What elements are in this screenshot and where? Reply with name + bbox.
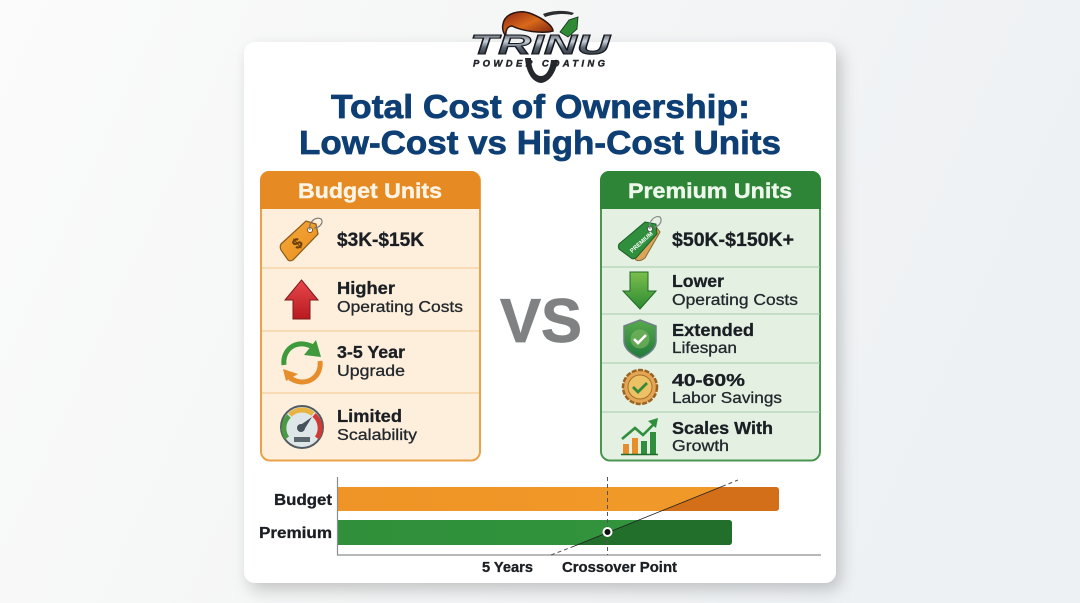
row: growth: Growth (672, 438, 729, 455)
row: price (618, 217, 794, 261)
icon: gauge (281, 406, 323, 448)
axis label: crossover point: Crossover Point (562, 560, 677, 576)
icon: badge (623, 370, 657, 404)
icon: price tag (280, 218, 322, 261)
row: lifespan (624, 320, 754, 358)
row: price: $3K-$15K (337, 230, 424, 251)
budget header (260, 171, 480, 209)
icon: cycle arrows (283, 340, 321, 382)
row: upgrade: Upgrade (337, 363, 405, 380)
row: operating costs: Lower (672, 271, 724, 291)
icon: premium tags (618, 217, 661, 261)
row: upgrade (283, 340, 405, 382)
row: price: $50K-$150K+ (672, 230, 794, 251)
row: labor savings: 40-60% (672, 370, 746, 390)
main card (244, 42, 836, 583)
chart: cost crossover (259, 477, 821, 576)
icon: growth chart (621, 418, 658, 454)
row: upgrade: 3-5 Year (337, 342, 405, 362)
row: lifespan: Extended (672, 320, 754, 340)
row: operating costs (623, 271, 798, 309)
row: labor savings (623, 370, 782, 407)
panel: premium units (600, 171, 821, 460)
crossover marker (604, 528, 612, 536)
icon: shield (624, 320, 656, 358)
row: operating costs (285, 278, 463, 319)
row: price (280, 218, 424, 261)
row: lifespan: Lifespan (672, 340, 737, 357)
title (299, 88, 781, 161)
row: operating costs: Higher (337, 278, 395, 298)
icon: price tag: $ (289, 234, 307, 253)
row: operating costs: Operating Costs (337, 299, 463, 316)
row: scalability: Scalability (337, 427, 417, 444)
row: growth: Scales With (672, 418, 773, 438)
icon: green down arrow (623, 272, 656, 309)
logo: Trinu Powder Coating: TRINU (470, 29, 611, 60)
title: Total Cost of Ownership: (331, 88, 750, 125)
icon: premium tags: PREMIUM (629, 231, 655, 255)
logo: Trinu Powder Coating: POWDER COATING (473, 58, 606, 70)
logo: Trinu Powder Coating (470, 11, 611, 83)
row: operating costs: Operating Costs (672, 292, 798, 309)
budget bar (274, 487, 779, 511)
budget bar: Budget (274, 492, 332, 509)
row: scalability (281, 406, 417, 448)
row: labor savings: Labor Savings (672, 390, 782, 407)
premium bar (259, 520, 732, 545)
premium header: Premium Units (628, 180, 792, 203)
row: scalability: Limited (337, 406, 402, 426)
axis label: 5 years: 5 Years (482, 560, 533, 576)
row: growth (621, 418, 773, 455)
premium bar: Premium (259, 525, 332, 542)
icon: red up arrow (285, 280, 318, 319)
panel: budget units (260, 171, 480, 460)
premium header (600, 171, 821, 209)
vs label: VS (500, 287, 582, 356)
budget header: Budget Units (298, 180, 442, 203)
title: Low-Cost vs High-Cost Units (299, 124, 781, 161)
